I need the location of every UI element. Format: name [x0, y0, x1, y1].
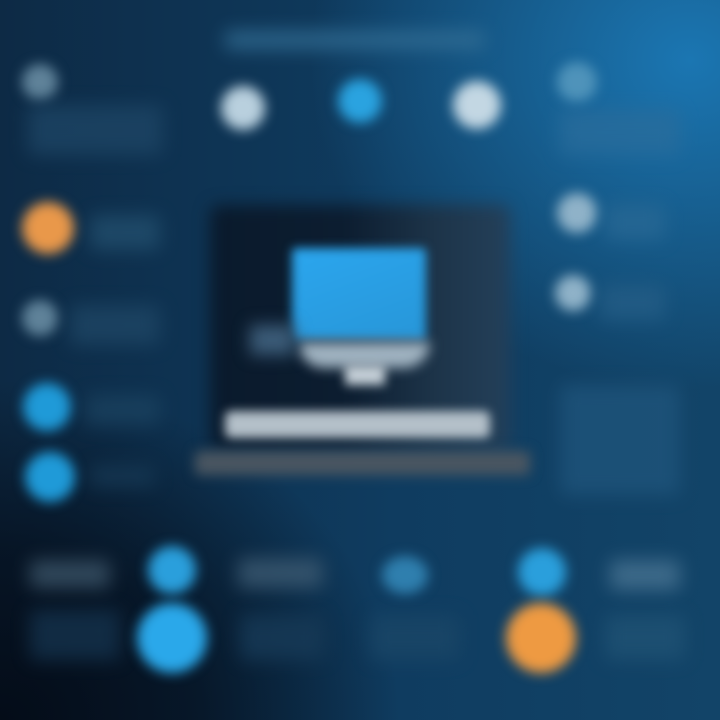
text block: left blue two	[90, 465, 155, 487]
icon: bottom blue large left	[137, 603, 207, 673]
text block: bottom middle detail	[370, 615, 460, 660]
text block: bottom column one detail	[30, 610, 120, 660]
text block: right node two	[600, 285, 665, 320]
text block: right lower	[560, 385, 680, 495]
icon: left node blue one	[23, 383, 71, 431]
laptop base	[195, 451, 530, 475]
laptop lid	[210, 205, 510, 450]
icon: orange node left	[22, 202, 74, 254]
icon: bottom middle node	[382, 556, 428, 594]
laptop screen	[292, 248, 426, 340]
text block: bottom column two detail	[240, 615, 325, 660]
title	[225, 31, 485, 49]
icon: right node one	[557, 193, 597, 233]
icon: bottom blue small left	[148, 546, 196, 594]
text block: top right	[560, 110, 680, 155]
icon: bottom orange large right	[506, 603, 576, 673]
icon: left node blue two	[25, 452, 75, 502]
icon: bottom blue small right	[518, 548, 566, 596]
text block: orange node left	[90, 215, 160, 250]
text block: top left	[28, 105, 163, 155]
text block: bottom right detail	[605, 615, 685, 660]
text block: left blue one	[85, 395, 160, 425]
icon: left node grey	[22, 300, 58, 336]
icon: top node two	[338, 79, 382, 123]
text block: bottom column two	[238, 558, 323, 588]
icon: top left node	[22, 64, 58, 100]
illustration: laptop	[189, 198, 536, 482]
icon: top right node	[557, 62, 597, 102]
icon: right node two	[555, 275, 591, 311]
text block: bottom column one	[30, 560, 110, 588]
text block: right node one	[605, 205, 665, 240]
monitor stand	[298, 342, 430, 368]
text block: bottom right	[610, 560, 680, 590]
text block: left grey	[70, 305, 160, 345]
keyboard	[225, 411, 490, 438]
icon: top node three	[453, 81, 501, 129]
stand neck	[345, 365, 385, 385]
side text in screen	[250, 325, 295, 355]
icon: top node one	[221, 86, 265, 130]
